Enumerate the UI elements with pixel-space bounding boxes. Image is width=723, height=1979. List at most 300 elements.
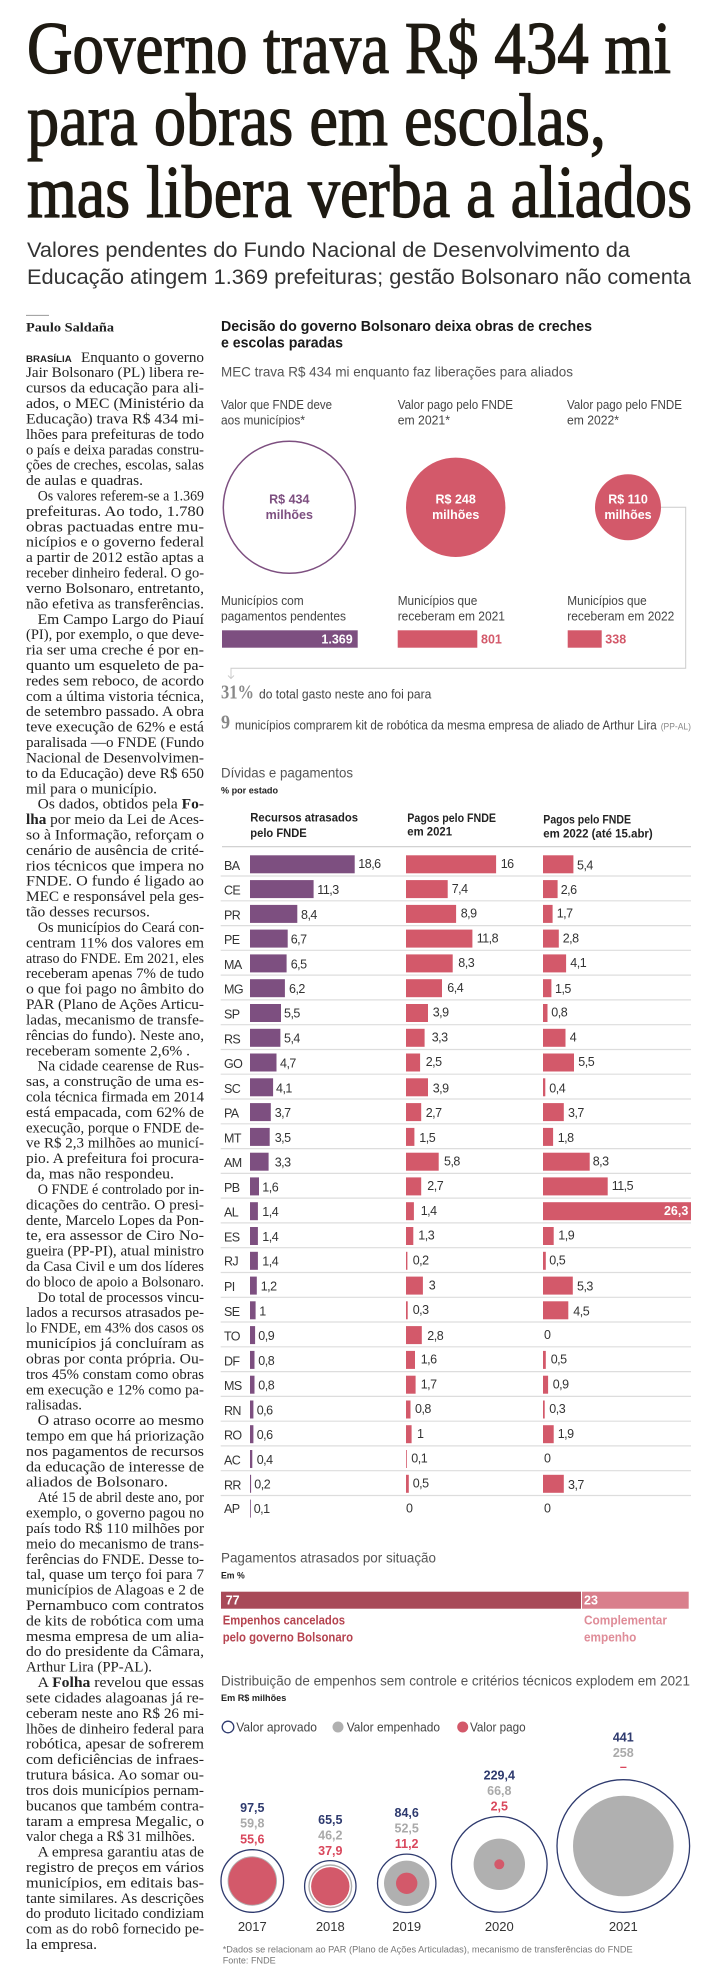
article body text: centram 11% dos valores em: [26, 935, 205, 951]
title: [27, 8, 692, 234]
panel: valor pago em 2022: 338: [605, 632, 626, 646]
row: ES: 1,3: [418, 1229, 435, 1243]
row: AP: 0,1: [254, 1502, 270, 1516]
article body text: Em Campo Largo do Piauí: [38, 612, 204, 628]
callout: 9 municípios: [221, 712, 691, 734]
article body text: sete cidades alagoanas já re-: [26, 1690, 204, 1706]
article body text: Nacional de Desenvolvimen-: [26, 750, 204, 766]
row: GO: [221, 1054, 691, 1074]
row: PA: PA: [224, 1107, 240, 1121]
article body text: Educação) trava R$ 434 mi-: [26, 411, 204, 427]
row: MT: MT: [224, 1131, 242, 1145]
callout: 31% do total: do total gasto neste ano foi para: [259, 687, 432, 702]
article body text: de kits de robótica com uma: [26, 1613, 205, 1629]
panel: valor pago em 2022: receberam em 2022: [567, 609, 674, 623]
panel: valor pago em 2021: [398, 398, 513, 648]
panel: valor que FNDE deve: [221, 398, 358, 648]
row: GO: 5,5: [578, 1055, 595, 1069]
row: GO: GO: [224, 1057, 243, 1071]
bubble: 2017: 97,5: [240, 1801, 265, 1815]
row: PI: [221, 1277, 691, 1297]
row: AP: 0: [406, 1501, 413, 1515]
bubble: 2018: 65,5: [318, 1813, 343, 1827]
article body text: ladas, mecanismo de transfe-: [26, 1012, 204, 1028]
bubble: 2020: 2,5: [491, 1800, 508, 1814]
row: AL: AL: [224, 1206, 239, 1220]
callout: 9 municípios: 9: [221, 712, 230, 734]
panel: valor pago em 2021: milhões: [432, 508, 479, 522]
row: ES: 1,4: [262, 1230, 279, 1244]
article body text: valor chega a R$ 31 milhões.: [26, 1829, 195, 1845]
row: DF: 0,5: [551, 1353, 567, 1367]
article body text: Pernambuco com contratos: [26, 1598, 204, 1614]
heading: distribuição de empenhos: [221, 1673, 690, 1704]
article body text: Os dados, obtidos pela Fo-: [38, 797, 204, 813]
heading: distribuição de empenhos: Distribuição de empenhos sem controle e critérios técnicos explodem em 2021: [221, 1673, 690, 1689]
article body text: ria ser uma creche é por en-: [26, 643, 204, 659]
row: PB: 1,6: [262, 1180, 279, 1194]
article body text: to da Educação) deve R$ 650: [26, 766, 204, 782]
article body text: exemplo, o governo pagou no: [26, 1506, 204, 1522]
article body text: de aulas e quadras.: [26, 473, 143, 489]
heading: dívidas e pagamentos: [221, 765, 353, 796]
row: PI: 3: [429, 1278, 436, 1292]
row: AM: [221, 1153, 691, 1173]
row: RN: RN: [224, 1404, 241, 1418]
bubble: 2021: –: [620, 1760, 627, 1774]
row: PE: [221, 930, 691, 950]
row: BA: [221, 855, 691, 876]
article body text: dente, Marcelo Lopes da Pon-: [26, 1213, 204, 1229]
row: TO: TO: [224, 1330, 241, 1344]
row: AC: AC: [224, 1454, 241, 1468]
bubble: 2017: 2017: [238, 1919, 267, 1934]
row: SC: [221, 1078, 691, 1099]
row: AM: 3,3: [275, 1156, 291, 1170]
row: MS: 0,9: [553, 1377, 569, 1391]
row: AC: 0,4: [257, 1453, 273, 1467]
article body text: nos pagamentos de recursos: [26, 1444, 204, 1460]
panel: valor que FNDE deve: Municípios com: [221, 594, 304, 608]
row: SE: [221, 1301, 691, 1322]
row: RJ: 0,2: [413, 1254, 429, 1268]
legend: Valor pago: [470, 1721, 526, 1735]
row: AM: AM: [224, 1156, 242, 1170]
row: TO: 2,8: [427, 1329, 444, 1343]
row: SP: 3,9: [433, 1006, 449, 1020]
article body text: tros 45% constam como obras: [26, 1367, 204, 1383]
row: AP: 0: [544, 1501, 551, 1515]
article body text: rios técnicos que impera no: [26, 858, 204, 874]
article body text: Arthur Lira (PP-AL).: [26, 1660, 152, 1676]
article body text: cursos da educação para ali-: [26, 381, 204, 397]
bubble: 2017: [221, 1801, 284, 1934]
row: MS: 1,7: [421, 1377, 437, 1391]
column headers: Recursos atrasados: [250, 811, 358, 825]
subtitle: Educação atingem 1.369 prefeituras; gestão Bolsonaro não comenta: [27, 265, 691, 289]
bubble: 2017: 55,6: [240, 1832, 265, 1846]
row: RR: RR: [224, 1478, 241, 1492]
panel: valor que FNDE deve: R$ 434: [269, 493, 309, 507]
row: PB: 2,7: [427, 1179, 444, 1193]
bubble: 2019: [378, 1806, 436, 1934]
row: SC: SC: [224, 1082, 241, 1096]
row: PR: PR: [224, 908, 241, 922]
row: ES: 1,9: [558, 1229, 575, 1243]
panel: valor pago em 2021: Municípios que: [398, 594, 477, 608]
bubble: 2021: [557, 1730, 690, 1934]
title: para obras em escolas,: [27, 80, 606, 162]
row: RS: [221, 1029, 691, 1050]
legend: Valor aprovado: [236, 1721, 317, 1735]
article body text: mesma empresa de um alia-: [26, 1629, 204, 1645]
article body text: municípios já concluíram as: [26, 1336, 204, 1352]
article body text: cola técnica firmada em 2014: [26, 1090, 205, 1106]
row: BA: 18,6: [358, 857, 381, 871]
row: RO: 1: [417, 1427, 424, 1441]
bubble: 2018: [305, 1813, 356, 1934]
byline: Paulo Saldaña: [26, 319, 115, 334]
bubble: 2020: 66,8: [487, 1784, 512, 1798]
row: MG: [221, 979, 691, 1000]
row: MG: MG: [224, 983, 243, 997]
row: SE: SE: [224, 1305, 240, 1319]
row: PR: 8,4: [301, 908, 317, 922]
graphic heading: [221, 318, 592, 352]
article body text: lhões de dinheiro federal para: [26, 1721, 205, 1737]
bubble: 2020: 229,4: [484, 1769, 515, 1783]
article body text: lhões para prefeituras de todo: [26, 427, 204, 443]
article body text: com deficiências de infraes-: [26, 1752, 204, 1768]
article body text: MEC e responsável pela ges-: [26, 889, 204, 905]
row: MT: [221, 1128, 691, 1149]
article body text: dicações do centrão. O presi-: [26, 1197, 204, 1213]
article body text: da educação de interesse de: [26, 1459, 204, 1475]
article body text: taram a empresa Megalic, o: [26, 1814, 204, 1830]
article body text: Até 15 de abril deste ano, por: [38, 1490, 204, 1506]
row: CE: 7,4: [452, 882, 468, 896]
bubble: 2018: 46,2: [318, 1828, 343, 1842]
article body text: lha por meio da Lei de Aces-: [26, 812, 204, 828]
row: AM: 5,8: [444, 1154, 460, 1168]
row: PE: 6,7: [291, 933, 307, 947]
article body text: O atraso ocorre ao mesmo: [38, 1413, 204, 1429]
article body text: do do presidente da Câmara,: [26, 1644, 204, 1660]
row: CE: 2,6: [561, 883, 577, 897]
panel: valor que FNDE deve: 1.369: [321, 632, 353, 646]
row: TO: 0,9: [258, 1329, 275, 1343]
article body text: ados, o MEC (Ministério da: [26, 396, 205, 412]
article body text: gueira (PP-PI), atual ministro: [26, 1244, 204, 1260]
panel: valor pago em 2021: 801: [481, 632, 502, 646]
bubble: 2019: 2019: [392, 1919, 421, 1934]
article body text: tempo em que há priorização: [26, 1428, 204, 1444]
row: AL: 1,4: [262, 1205, 279, 1219]
panel: valor que FNDE deve: Valor que FNDE deve: [221, 398, 332, 412]
article body text: ve R$ 2,3 milhões ao municí-: [26, 1136, 204, 1152]
column headers: em 2022 (até 15.abr): [543, 826, 653, 840]
row: PE: 11,8: [477, 931, 499, 945]
row: PI: 5,3: [577, 1280, 593, 1294]
panel: valor que FNDE deve: milhões: [266, 508, 313, 522]
article body text: não efetiva as transferências.: [26, 596, 204, 612]
panel: valor pago em 2022: Valor pago pelo FNDE: [567, 398, 682, 412]
bubble: 2020: [452, 1769, 547, 1934]
stacked bar: pagamentos atrasados: empenho: [584, 1631, 637, 1645]
article body text: receberam apenas 7% de tudo: [26, 966, 204, 982]
article body text: lados a recursos atrasados pe-: [26, 1305, 204, 1321]
article body text: sas, a construção de uma es-: [26, 1074, 204, 1090]
article body text: prefeituras. Ao todo, 1.780: [26, 504, 204, 520]
article body text: país todo R$ 110 milhões por: [26, 1521, 204, 1537]
row: RS: 3,3: [432, 1031, 448, 1045]
row: CE: [221, 880, 691, 901]
article body text: nicípios e o governo federal: [26, 535, 204, 551]
heading: dívidas e pagamentos: % por estado: [221, 785, 278, 796]
bubble: 2021: 441: [613, 1730, 634, 1744]
row: AL: 1,4: [421, 1204, 437, 1218]
bubble: 2020: 2020: [485, 1919, 514, 1934]
bubble: 2019: 84,6: [395, 1806, 419, 1820]
bubble: 2018: 37,9: [318, 1844, 343, 1858]
article body text: do bloco de apoio a Bolsonaro.: [26, 1274, 204, 1290]
bubble: 2021: 2021: [609, 1919, 638, 1934]
row: MA: 8,3: [458, 956, 475, 970]
article body text: aliados de Bolsonaro.: [26, 1475, 168, 1491]
article body text: A Folha revelou que essas: [38, 1675, 204, 1691]
article body text: obras por conta própria. Ou-: [26, 1352, 204, 1368]
row: SP: 0,8: [551, 1006, 568, 1020]
article body text: com a última vistoria técnica,: [26, 689, 204, 705]
column headers: pelo FNDE: [250, 826, 307, 840]
heading: pagamentos atrasados por situação: [221, 1549, 436, 1581]
column headers: em 2021: [407, 825, 452, 839]
article body text: FNDE. O fundo é ligado ao: [26, 874, 204, 890]
row: RS: 5,4: [284, 1031, 300, 1045]
row: SC: 3,9: [433, 1081, 449, 1095]
row: AC: [221, 1450, 691, 1471]
row: SP: [221, 1004, 691, 1025]
article body text: bucanos que também contra-: [26, 1798, 204, 1814]
article body text: rências do fundo). Neste ano,: [26, 1028, 204, 1044]
row: GO: 4,7: [280, 1056, 296, 1070]
article body text: o país e deixa paradas constru-: [26, 442, 204, 458]
article body text: Do total de processos vincu-: [38, 1290, 204, 1306]
bubble: 2017: 59,8: [240, 1817, 265, 1831]
panel: valor pago em 2022: Municípios que: [567, 594, 647, 608]
row: SP: SP: [224, 1008, 240, 1022]
row: RR: [221, 1475, 691, 1496]
row: RR: 0,5: [413, 1477, 429, 1491]
panel: valor pago em 2022: em 2022*: [567, 414, 619, 428]
panel: valor pago em 2022: R$ 110: [608, 493, 648, 507]
article body text: verno Bolsonaro, entretanto,: [26, 581, 204, 597]
arrow: connector from 2022 circle to callout: [228, 507, 686, 678]
row: PE: 2,8: [563, 931, 579, 945]
article body text: o que foi pago no âmbito do: [26, 982, 204, 998]
row: MG: 1,5: [555, 982, 571, 996]
row: PA: 3,7: [568, 1106, 584, 1120]
row: AM: 8,3: [593, 1154, 609, 1168]
article body text: municípios de Alagoas e 2 de: [26, 1583, 204, 1599]
article body text: quanto um esqueleto de pa-: [26, 658, 204, 674]
panel: valor pago em 2021: Valor pago pelo FNDE: [398, 398, 513, 412]
row: RR: 0,2: [254, 1477, 271, 1491]
row: RS: RS: [224, 1032, 240, 1046]
row: AL: 26,3: [664, 1204, 688, 1218]
callout: 31% do total: [221, 681, 432, 703]
bar chart: dívidas e pagamentos por estado: [221, 855, 691, 1518]
row: TO: 0: [544, 1328, 551, 1342]
panel: valor pago em 2022: milhões: [604, 508, 652, 522]
row: RJ: RJ: [224, 1254, 238, 1268]
bubble: 2019: 11,2: [395, 1837, 419, 1851]
callout: 9 municípios: (PP-AL): [661, 721, 691, 732]
row: RS: 4: [570, 1031, 577, 1045]
article body text: atraso do FNDE. Em 2021, eles: [26, 951, 204, 967]
footnote: Fonte: FNDE: [223, 1956, 276, 1967]
row: MA: MA: [224, 958, 243, 972]
article body text: ceberam neste ano R$ 26 mi-: [26, 1706, 204, 1722]
row: RN: [221, 1400, 691, 1421]
article body text: da Casa Civil e um dos líderes: [26, 1259, 204, 1275]
row: BA: BA: [224, 859, 241, 873]
row: SC: 4,1: [276, 1081, 292, 1095]
row: SE: 1: [259, 1304, 266, 1318]
row: RO: 0,6: [257, 1428, 273, 1442]
row: PB: [221, 1177, 691, 1198]
article body text: com as do robô fornecido pe-: [26, 1922, 204, 1938]
article body text: redes sem reboco, de acordo: [26, 673, 204, 689]
row: PR: [221, 905, 691, 926]
article body text: ções de creches, escolas, salas: [26, 458, 204, 474]
callout: 9 municípios: municípios comprarem kit de robótica da mesma empresa de aliado de Arthur Lira: [235, 717, 657, 732]
article body text: la empresa.: [26, 1937, 97, 1953]
row: RO: RO: [224, 1429, 242, 1443]
stacked bar: pagamentos atrasados: Empenhos cancelados: [223, 1613, 345, 1627]
row: PE: PE: [224, 933, 240, 947]
article body text: do produto licitado condiziam: [26, 1906, 205, 1922]
row: CE: 11,3: [317, 883, 339, 897]
article body text: teve execução de 62% e está: [26, 720, 205, 736]
row: BA: 5,4: [577, 858, 593, 872]
article body text: pio. A prefeitura foi procura-: [26, 1151, 204, 1167]
row: DF: 0,8: [258, 1354, 275, 1368]
row: MS: [221, 1376, 691, 1396]
bubble: 2018: 2018: [316, 1919, 345, 1934]
row: PB: 11,5: [612, 1179, 634, 1193]
article body text: obras pactuadas entre mu-: [26, 519, 204, 535]
row: MG: 6,4: [447, 981, 464, 995]
row: MS: 0,8: [258, 1379, 275, 1393]
graphic heading: Decisão do governo Bolsonaro deixa obras de creches: [221, 318, 592, 335]
article body text: [26, 350, 205, 1953]
article body text: tante similares. As descrições: [26, 1891, 204, 1907]
article body text: Os municípios do Ceará con-: [38, 920, 204, 936]
footnote: *Dados se relacionam ao PAR (Plano de Ações Articuladas), mecanismo de transferências do FNDE: [223, 1945, 633, 1956]
panel: valor que FNDE deve: pagamentos pendentes: [221, 609, 346, 623]
article body text: da, mas não respondeu.: [26, 1166, 174, 1182]
row: PB: PB: [224, 1181, 240, 1195]
row: PR: 8,9: [461, 907, 477, 921]
stacked bar: pagamentos atrasados: pelo governo Bolsonaro: [223, 1631, 353, 1645]
heading: pagamentos atrasados por situação: Em %: [221, 1570, 245, 1581]
row: AC: 0,1: [411, 1452, 428, 1466]
footnote: [223, 1945, 633, 1967]
graphic heading: e escolas paradas: [221, 335, 343, 352]
row: RJ: 0,5: [549, 1254, 566, 1268]
legend: Valor empenhado: [347, 1721, 440, 1735]
legend: [222, 1721, 526, 1735]
article body text: lo FNDE, em 43% dos casos os: [26, 1321, 204, 1337]
bubble: 2019: 52,5: [395, 1821, 419, 1835]
article body text: execução, porque o FNDE de-: [26, 1120, 204, 1136]
bubble: 2021: 258: [613, 1746, 634, 1760]
article body text: ferências do FNDE. Desse to-: [26, 1552, 204, 1568]
article body text: (PI), por exemplo, o que deve-: [26, 627, 204, 643]
row: ES: ES: [224, 1230, 240, 1244]
article body text: cenário de ausência de crité-: [26, 843, 204, 859]
column headers: [222, 811, 691, 847]
panel: valor pago em 2021: receberam em 2021: [398, 609, 505, 623]
row: DF: DF: [224, 1354, 240, 1368]
row: PA: 3,7: [275, 1106, 291, 1120]
article body text: PAR (Plano de Ações Articu-: [26, 997, 204, 1013]
row: PA: 2,7: [426, 1106, 442, 1120]
article body text: a partir de 2012 estão aptas a: [26, 550, 205, 566]
row: PA: [221, 1103, 691, 1124]
row: MT: 1,5: [419, 1131, 436, 1145]
stacked bar: pagamentos atrasados: Complementar: [584, 1613, 667, 1627]
article body text: mil para o município.: [26, 781, 157, 797]
row: MA: 4,1: [570, 956, 587, 970]
article body text: robótica, apesar de sofrerem: [26, 1737, 205, 1753]
row: RN: 0,6: [257, 1404, 273, 1418]
stacked bar: pagamentos atrasados: [221, 1592, 689, 1645]
row: SP: 5,5: [284, 1006, 300, 1020]
article body text: Jair Bolsonaro (PL) libera re-: [26, 365, 204, 381]
column headers: Pagos pelo FNDE: [407, 811, 496, 825]
row: RR: 3,7: [568, 1478, 584, 1492]
article body text: so à Informação, reforçam o: [26, 828, 204, 844]
callout: 31% do total: 31%: [221, 681, 254, 703]
row: MT: 3,5: [275, 1131, 291, 1145]
row: MA: [221, 954, 691, 975]
row: RN: 0,8: [415, 1402, 431, 1416]
panel: valor pago em 2021: em 2021*: [398, 414, 450, 428]
article body text: está empacada, com 62% de: [26, 1105, 204, 1121]
row: PI: PI: [224, 1280, 235, 1294]
row: MT: 1,8: [558, 1131, 574, 1145]
row: MS: MS: [224, 1379, 242, 1393]
stacked bar: pagamentos atrasados: 77: [226, 1594, 240, 1608]
row: RN: 0,3: [549, 1402, 566, 1416]
heading: dívidas e pagamentos: Dívidas e pagamentos: [221, 765, 353, 781]
heading: distribuição de empenhos: Em R$ milhões: [221, 1693, 286, 1704]
row: MA: 6,5: [291, 957, 307, 971]
column headers: Pagos pelo FNDE: [543, 812, 631, 826]
row: PI: 1,2: [261, 1280, 277, 1294]
row: AP: AP: [224, 1502, 240, 1516]
article body text: BRASÍLIA: [26, 354, 72, 365]
article body text: receber dinheiro federal. O go-: [26, 566, 204, 582]
article body text: Enquanto o governo: [81, 350, 204, 366]
row: DF: [221, 1351, 691, 1372]
row: AC: 0: [544, 1452, 551, 1466]
row: ES: [221, 1227, 691, 1248]
stacked bar: pagamentos atrasados: 23: [584, 1594, 598, 1608]
article body text: meio do mecanismo de trans-: [26, 1536, 204, 1552]
